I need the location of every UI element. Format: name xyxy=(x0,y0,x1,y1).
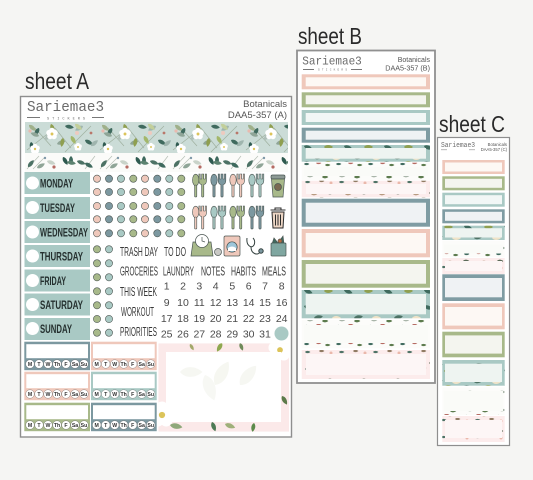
weekly tracker boxes: Th xyxy=(121,362,127,368)
calendar numbers: 31 xyxy=(259,328,271,340)
weekly tracker boxes: Th xyxy=(54,362,60,368)
weekly tracker boxes: W xyxy=(112,362,117,368)
weekly tracker boxes: W xyxy=(46,392,51,398)
task labels: WORKOUT xyxy=(121,305,154,319)
calendar numbers: 17 xyxy=(161,313,173,325)
label: teal xyxy=(442,193,505,207)
calendar numbers: 20 xyxy=(210,313,222,325)
task labels: TO DO xyxy=(164,245,186,259)
weekly tracker boxes: W xyxy=(46,423,51,429)
weekly tracker boxes: W xyxy=(112,392,117,398)
label: pink xyxy=(302,74,430,89)
day labels: WEDNESDAY xyxy=(40,226,88,240)
calendar numbers: 14 xyxy=(243,297,255,309)
calendar numbers: 22 xyxy=(243,313,255,325)
calendar numbers: 3 xyxy=(196,280,202,292)
icon: grocery bag xyxy=(271,236,286,256)
product name C: Botanicals xyxy=(488,142,507,147)
weekly tracker boxes: M xyxy=(28,362,32,368)
weekly tracker boxes: Th xyxy=(121,423,127,429)
calendar numbers: 12 xyxy=(210,297,222,309)
weekly tracker boxes: F xyxy=(131,362,134,368)
task labels: TRASH DAY xyxy=(120,245,158,259)
day labels: SATURDAY xyxy=(40,298,83,312)
large label: floral pink xyxy=(302,350,430,379)
large label: slate xyxy=(442,274,505,301)
large label: floral white xyxy=(302,320,430,348)
product name C xyxy=(481,142,508,152)
large label: floral teal xyxy=(442,360,505,386)
calendar numbers: 28 xyxy=(210,328,222,340)
panel: sheet B xyxy=(297,50,435,383)
weekly tracker boxes: Sa xyxy=(72,392,78,398)
weekly tracker boxes: Su xyxy=(147,392,154,398)
weekly tracker boxes: Sa xyxy=(139,362,145,368)
brand logo: STICKERS xyxy=(47,118,85,122)
large label: floral teal xyxy=(302,290,430,318)
calendar numbers: 27 xyxy=(193,328,205,340)
brand logo B: Sariemae3 xyxy=(302,54,362,68)
task labels: LAUNDRY xyxy=(163,264,194,278)
weekly tracker boxes: M xyxy=(28,423,32,429)
brand logo: Sariemae3 xyxy=(27,99,104,116)
calendar numbers xyxy=(161,280,288,340)
calendar numbers: 4 xyxy=(213,280,219,292)
panel: sheet A xyxy=(20,96,292,437)
calendar numbers: 25 xyxy=(161,328,173,340)
weekly tracker boxes: Su xyxy=(81,392,87,398)
large label: floral white xyxy=(442,387,505,415)
task labels: HABITS xyxy=(231,264,256,278)
task labels: GROCERIES xyxy=(120,264,158,278)
weekly tracker boxes: F xyxy=(64,392,68,398)
calendar numbers: 23 xyxy=(259,313,271,325)
calendar numbers: 7 xyxy=(262,280,268,292)
weekly tracker boxes: T xyxy=(37,392,41,398)
calendar numbers: 30 xyxy=(243,328,255,340)
large label: pink xyxy=(302,229,430,257)
calendar numbers: 15 xyxy=(259,297,271,309)
washi strip: floral xyxy=(25,122,288,153)
weekly tracker boxes: Th xyxy=(54,423,60,429)
weekly tracker boxes: F xyxy=(131,392,134,398)
label: slate xyxy=(302,128,430,143)
label: floral teal xyxy=(442,226,505,240)
large label: floral pink xyxy=(442,416,505,442)
weekly tracker boxes: Sa xyxy=(139,423,145,429)
weekly tracker boxes: M xyxy=(95,423,99,429)
icon: washing machine xyxy=(224,236,240,256)
weekly tracker boxes: T xyxy=(104,423,108,429)
calendar numbers: 9 xyxy=(164,297,170,309)
calendar numbers: 19 xyxy=(193,313,205,325)
panel: sheet C xyxy=(438,138,510,446)
label: teal xyxy=(302,110,430,125)
label: slate xyxy=(442,209,505,223)
calendar numbers: 11 xyxy=(194,297,205,309)
weekly tracker boxes: Su xyxy=(81,423,87,429)
weekly tracker boxes: W xyxy=(112,423,117,429)
brand logo B: STICKERS xyxy=(318,68,347,72)
task labels: NOTES xyxy=(201,264,225,278)
task labels: THIS WEEK xyxy=(120,285,157,299)
weekly tracker boxes: T xyxy=(104,392,108,398)
calendar numbers: 29 xyxy=(226,328,238,340)
day labels: THURSDAY xyxy=(40,250,83,264)
large label: green xyxy=(302,260,430,288)
icon: scale xyxy=(191,234,222,256)
product name: Botanicals xyxy=(243,99,287,110)
dot stickers grid xyxy=(93,175,185,336)
large label: pink xyxy=(442,303,505,329)
product name B xyxy=(385,57,430,72)
calendar numbers: 16 xyxy=(276,297,288,309)
day labels xyxy=(24,172,90,340)
label: floral teal xyxy=(302,145,430,162)
heading: sheet B: sheet B xyxy=(298,23,362,49)
weekly tracker boxes xyxy=(24,342,157,431)
label: green xyxy=(302,92,430,107)
label: floral white xyxy=(442,241,505,257)
weekly tracker boxes: Sa xyxy=(139,392,145,398)
weekly tracker boxes: Sa xyxy=(72,362,78,368)
large label: green xyxy=(442,332,505,357)
label: green xyxy=(442,176,505,190)
calendar numbers: 21 xyxy=(226,313,238,325)
weekly tracker boxes: M xyxy=(95,392,99,398)
day labels: TUESDAY xyxy=(40,201,75,215)
washi strip: leaves xyxy=(25,153,288,172)
weekly tracker boxes: T xyxy=(37,423,41,429)
weekly tracker boxes: Th xyxy=(121,392,127,398)
weekly tracker boxes: F xyxy=(64,362,68,368)
product name B: Botanicals xyxy=(398,57,430,64)
weekly tracker boxes: M xyxy=(95,362,99,368)
product name C: DAA5-357 (C) xyxy=(481,147,508,152)
calendar numbers: 6 xyxy=(246,280,252,292)
weekly tracker boxes: Sa xyxy=(72,423,78,429)
calendar numbers: 8 xyxy=(279,280,285,292)
weekly tracker boxes: T xyxy=(37,362,41,368)
weekly tracker boxes: W xyxy=(46,362,51,368)
label: floral pink xyxy=(442,258,505,274)
weekly tracker boxes: M xyxy=(28,392,32,398)
calendar numbers: 24 xyxy=(276,313,288,325)
label: pink xyxy=(442,160,505,174)
calendar numbers: 13 xyxy=(226,297,238,309)
product name: DAA5-357 (A) xyxy=(228,110,287,121)
task labels: MEALS xyxy=(262,264,286,278)
product name xyxy=(228,99,287,121)
weekly tracker boxes: F xyxy=(64,423,68,429)
product name B: DAA5-357 (B) xyxy=(385,64,430,72)
icon: stethoscope xyxy=(247,238,263,254)
weekly tracker boxes: F xyxy=(131,423,134,429)
calendar numbers: 2 xyxy=(180,280,186,292)
cutlery icons row 1 xyxy=(192,174,264,197)
weekly tracker boxes: Su xyxy=(147,362,154,368)
day labels: MONDAY xyxy=(40,176,73,190)
task labels: PRIORITIES xyxy=(120,325,157,339)
cutlery icons row 2 xyxy=(192,206,264,229)
weekly tracker boxes: Su xyxy=(147,423,154,429)
day labels: SUNDAY xyxy=(40,322,72,336)
large label: slate xyxy=(302,199,430,227)
calendar numbers: 18 xyxy=(177,313,189,325)
task labels xyxy=(120,245,286,339)
heading: sheet C: sheet C xyxy=(439,111,505,137)
weekly tracker boxes: Su xyxy=(81,362,87,368)
label: floral white xyxy=(302,163,430,180)
floral notes panel xyxy=(158,343,289,432)
weekly tracker boxes: T xyxy=(104,362,108,368)
day labels: FRIDAY xyxy=(40,274,66,288)
calendar numbers: 10 xyxy=(177,297,189,309)
weekly tracker boxes: Th xyxy=(54,392,60,398)
calendar numbers: 5 xyxy=(229,280,235,292)
calendar numbers: 1 xyxy=(164,280,170,292)
heading: sheet A: sheet A xyxy=(25,68,90,94)
label: floral pink xyxy=(302,181,430,197)
icon: trash can xyxy=(270,208,286,228)
icon: coffee cup xyxy=(271,175,285,197)
calendar numbers: 26 xyxy=(177,328,189,340)
brand logo C: Sariemae3 xyxy=(441,142,475,150)
